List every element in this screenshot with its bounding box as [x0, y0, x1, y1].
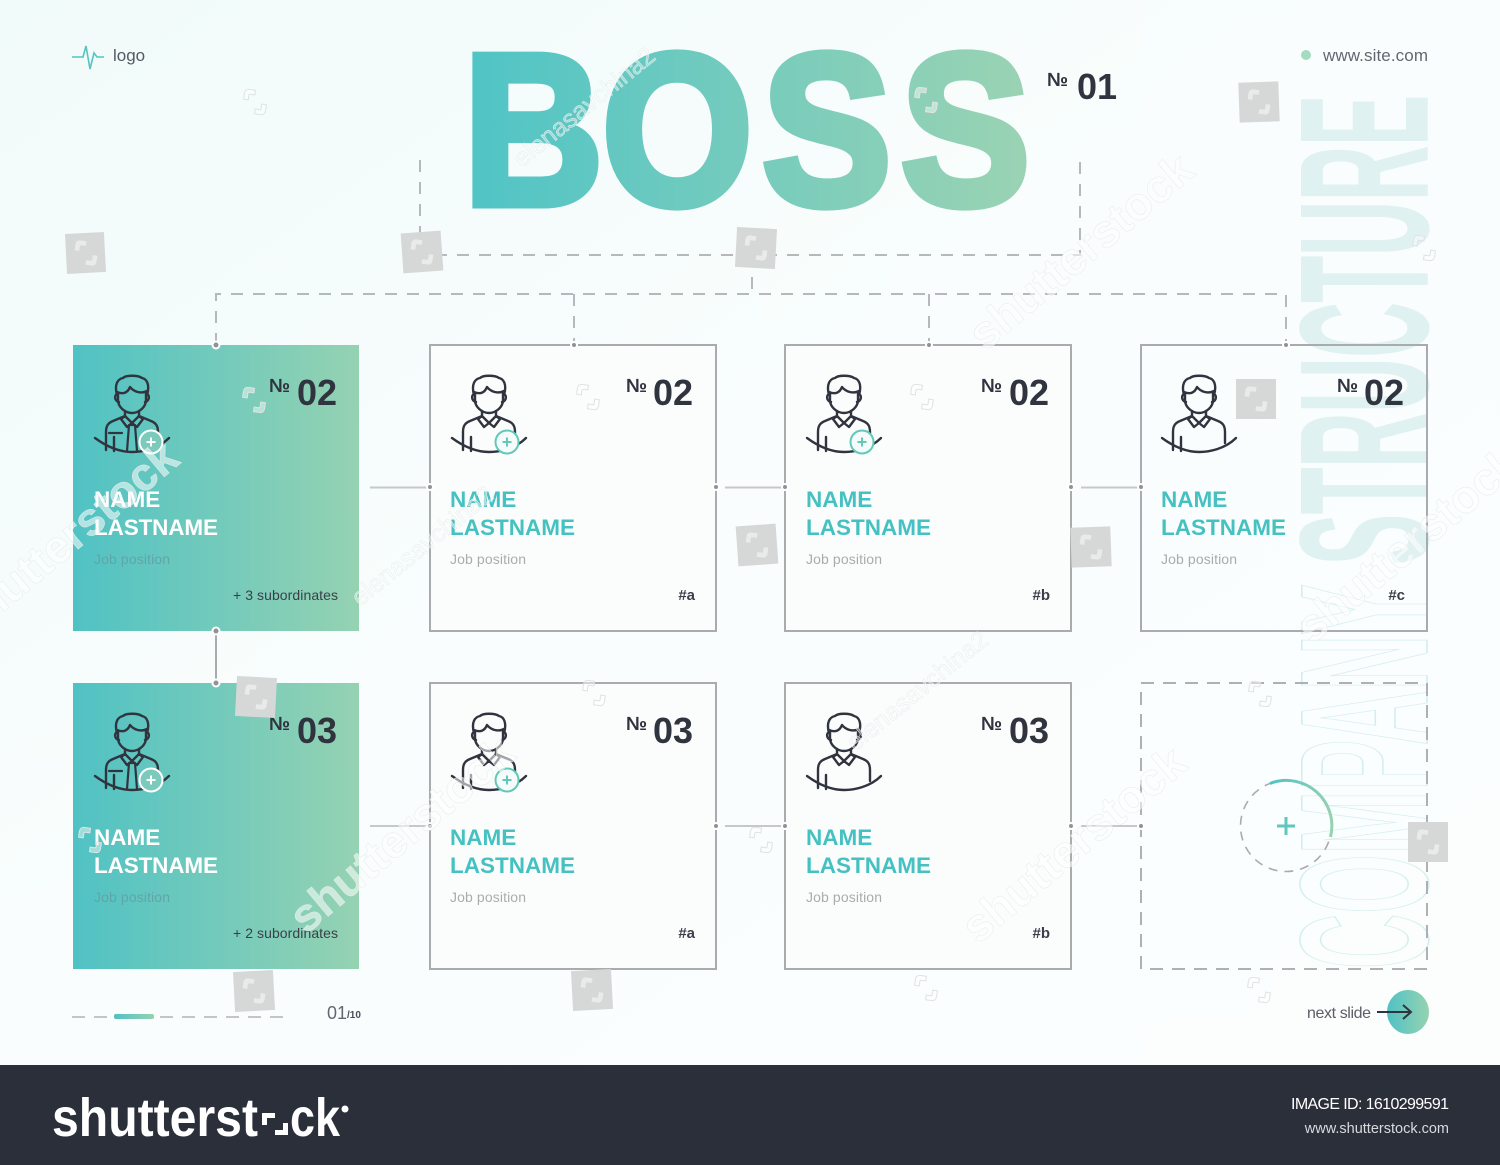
watermark: outlined bracket marks — [77, 87, 1437, 1003]
card: no 02 #b: Job position — [806, 551, 882, 567]
card: no 03 #a: LASTNAME — [450, 853, 575, 878]
card: no 03 lead: 03 — [297, 710, 337, 751]
vertical title: company structure: COMPANY — [1262, 584, 1466, 969]
footer brand: ck — [290, 1088, 341, 1148]
card: no 03 lead: Job position — [94, 889, 170, 905]
watermark: bracket marks on stamps — [73, 89, 1441, 1004]
card: no 03 lead: № — [269, 714, 290, 735]
watermark: grey stamps — [65, 81, 1448, 1012]
card: no 02 lead: № — [269, 376, 290, 397]
website: www.site.com — [1322, 46, 1428, 65]
card: no 02 lead: LASTNAME — [94, 515, 218, 540]
card: no 02 #a: Job position — [450, 551, 526, 567]
connector nodes — [212, 342, 1289, 829]
footer url: www.shutterstock.com — [1304, 1121, 1449, 1137]
dashed connectors — [216, 160, 1286, 345]
card: no 03 #b: LASTNAME — [806, 853, 931, 878]
card: no 03 #b: 03 — [1009, 710, 1049, 751]
card: no 03 #b: NAME — [806, 825, 872, 850]
card: no 02 #b: #b — [1032, 587, 1050, 604]
watermark: contributor text: elenasavchina2 — [841, 626, 994, 757]
empty slot with add button — [1141, 683, 1427, 969]
card: no 02 lead: Job position — [94, 551, 170, 567]
watermark: contributor text: elenasavchina2 — [508, 42, 661, 173]
card: no 02 lead: + 3 subordinates — [233, 587, 338, 603]
watermark: contributor text — [346, 42, 994, 757]
badge: plus — [850, 430, 874, 454]
solid connectors — [216, 488, 1141, 826]
badge: plus — [496, 430, 518, 454]
logo: logo — [113, 46, 145, 65]
card: no 02 #a: 02 — [653, 372, 693, 413]
card: no 03 lead: NAME — [94, 825, 160, 850]
card: no 03 #a: Job position — [450, 889, 526, 905]
card: no 03 lead: LASTNAME — [94, 853, 218, 878]
badge: plus — [140, 768, 162, 792]
next slide button: next slide — [1307, 1005, 1371, 1022]
card: no 02 #c: #c — [1388, 587, 1405, 604]
boss number: № — [1047, 70, 1068, 91]
card: no 03 #b: № — [981, 714, 1002, 735]
card: no 03 lead — [73, 683, 359, 969]
image id: IMAGE ID: 1610299591 — [1291, 1096, 1449, 1113]
card: no 03 #a: #a — [678, 925, 696, 942]
watermark: diagonal text: shutterstock — [951, 735, 1196, 953]
footer bar — [0, 1065, 1500, 1165]
pagination: /10 — [347, 1010, 361, 1021]
card: no 03 #b — [785, 683, 1071, 969]
card: no 02 #b: NAME — [806, 487, 872, 512]
card: no 02 #b: 02 — [1009, 372, 1049, 413]
card: no 03 #b: Job position — [806, 889, 882, 905]
pagination — [72, 1003, 361, 1023]
card: no 02 #a: NAME — [450, 487, 516, 512]
logo — [72, 46, 145, 69]
card: no 02 lead: 02 — [297, 372, 337, 413]
watermark: diagonal text — [0, 142, 1500, 953]
card: no 02 #c: 02 — [1364, 372, 1404, 413]
card: no 02 #a: LASTNAME — [450, 515, 575, 540]
card: no 02 lead — [73, 345, 359, 631]
card: no 02 #c: № — [1337, 376, 1358, 397]
watermark: diagonal text: shutterstock — [279, 725, 524, 943]
title: boss: BOSS — [464, 11, 1030, 250]
card: no 02 #c: Job position — [1161, 551, 1237, 567]
watermark: contributor text: elenasavchina2 — [346, 481, 499, 612]
card: no 02 #b: № — [981, 376, 1002, 397]
card: no 03 #b: #b — [1032, 925, 1050, 942]
card: no 02 #a — [430, 345, 716, 631]
boss number: 01 — [1077, 66, 1117, 107]
watermark: diagonal text: shutterstock — [958, 142, 1203, 360]
card: no 02 #a: #a — [678, 587, 696, 604]
card: no 03 #a: № — [626, 714, 647, 735]
card: no 02 #b: LASTNAME — [806, 515, 931, 540]
card: no 02 #c: LASTNAME — [1161, 515, 1286, 540]
card: no 03 #a — [430, 683, 716, 969]
boss number — [1047, 66, 1117, 107]
card: no 02 lead: NAME — [94, 487, 160, 512]
pagination: 01 — [327, 1003, 347, 1023]
card: no 02 #a: № — [626, 376, 647, 397]
card: no 02 #b — [785, 345, 1071, 631]
badge: plus — [140, 430, 162, 454]
footer brand: shutterst — [52, 1088, 258, 1148]
card: no 03 #a: 03 — [653, 710, 693, 751]
badge: plus — [496, 768, 518, 792]
card: no 02 #c — [1141, 345, 1427, 631]
card: no 03 lead: + 2 subordinates — [233, 925, 338, 941]
card: no 03 #a: NAME — [450, 825, 516, 850]
card: no 02 #c: NAME — [1161, 487, 1227, 512]
next slide button — [1307, 990, 1429, 1034]
